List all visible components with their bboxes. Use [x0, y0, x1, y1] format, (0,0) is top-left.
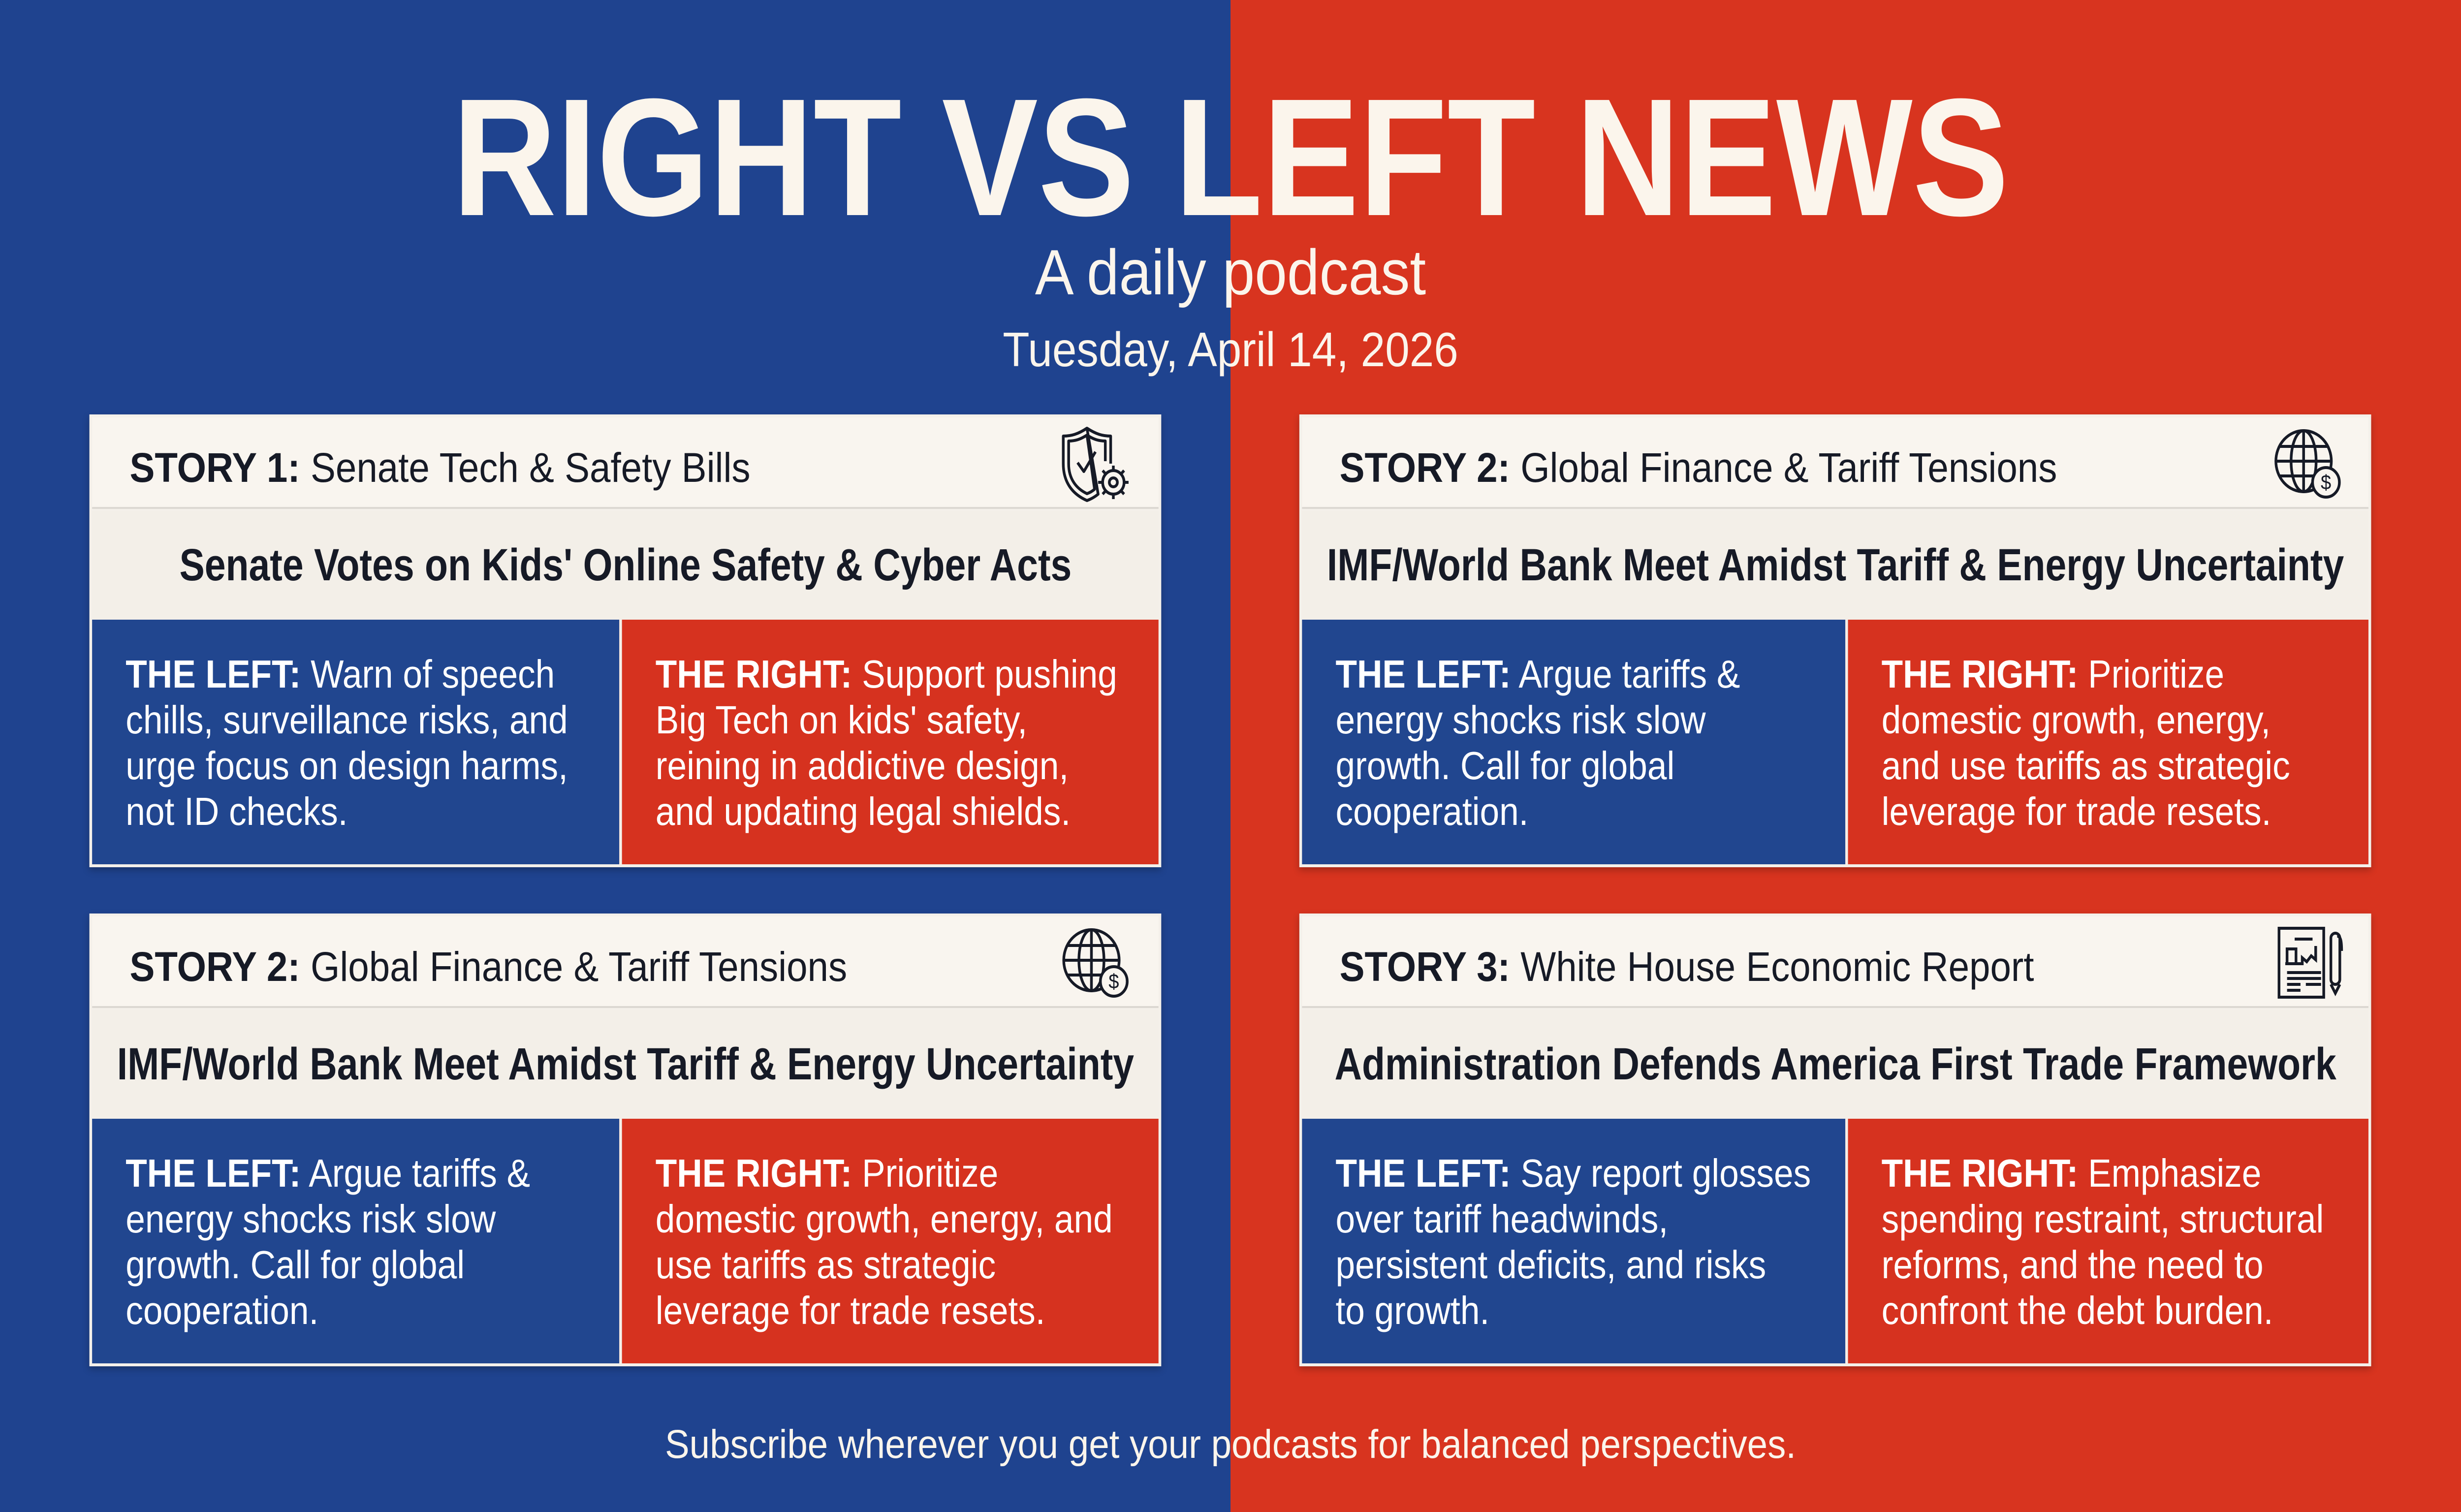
the right view: THE RIGHT: Support pushing	[656, 652, 1117, 696]
the right view	[1845, 1119, 2368, 1363]
the left view: chills, surveillance risks, and	[126, 698, 568, 742]
story headline	[1302, 1010, 2368, 1119]
the right view: and use tariffs as strategic	[1882, 744, 2290, 788]
story header: STORY 2: Global Finance & Tariff Tensions	[129, 944, 847, 990]
the left view: persistent deficits, and risks	[1335, 1243, 1766, 1287]
the right view	[619, 620, 1159, 864]
the left view: THE LEFT: Argue tariffs &	[1335, 652, 1740, 696]
panel: story 1	[90, 414, 1161, 867]
story headline: Senate Votes on Kids' Online Safety & Cyber Acts	[179, 540, 1072, 590]
the right view: reforms, and the need to	[1882, 1243, 2264, 1287]
story headline: IMF/World Bank Meet Amidst Tariff & Energy Uncertainty	[117, 1039, 1134, 1089]
the left view: energy shocks risk slow	[126, 1197, 496, 1241]
the right view: domestic growth, energy, and	[656, 1197, 1113, 1241]
the left view: cooperation.	[1335, 789, 1528, 833]
story header	[1302, 916, 2368, 1008]
icon: report with pen	[2278, 927, 2343, 999]
the left view: THE LEFT: Say report glosses	[1335, 1151, 1811, 1195]
story headline: IMF/World Bank Meet Amidst Tariff & Energy Uncertainty	[1326, 540, 2344, 590]
the left view	[92, 620, 619, 864]
icon: globe with dollar: $	[2321, 471, 2331, 494]
the right view: THE RIGHT: Prioritize	[1882, 652, 2224, 696]
the left view: energy shocks risk slow	[1335, 698, 1706, 742]
the right view: leverage for trade resets.	[656, 1289, 1045, 1332]
the right view: Big Tech on kids' safety,	[656, 698, 1027, 742]
title: RIGHT VS LEFT NEWS	[452, 64, 2009, 251]
story headline	[1302, 511, 2368, 620]
the right view: confront the debt burden.	[1882, 1289, 2273, 1332]
icon: globe with dollar	[2274, 429, 2341, 499]
icon: shield with gear	[1062, 427, 1129, 502]
icon: globe with dollar	[1062, 928, 1129, 998]
date: Tuesday, April 14, 2026	[1003, 322, 1458, 377]
story header: STORY 2: Global Finance & Tariff Tensions	[1340, 444, 2057, 491]
the right view: THE RIGHT: Emphasize	[1882, 1151, 2261, 1195]
story header	[1302, 417, 2368, 509]
icon: globe with dollar: $	[1108, 970, 1119, 993]
story headline: Administration Defends America First Trade Framework	[1334, 1039, 2336, 1089]
the left view: to growth.	[1335, 1289, 1489, 1332]
the left view: THE LEFT: Argue tariffs &	[126, 1151, 530, 1195]
story headline	[92, 1010, 1159, 1119]
story header	[92, 916, 1159, 1008]
the left view: THE LEFT: Warn of speech	[126, 652, 555, 696]
the right view: leverage for trade resets.	[1882, 789, 2271, 833]
the right view: THE RIGHT: Prioritize	[656, 1151, 998, 1195]
the left view	[1302, 620, 1845, 864]
the left view: urge focus on design harms,	[126, 744, 568, 788]
the right view: and updating legal shields.	[656, 789, 1071, 833]
footer text: Subscribe wherever you get your podcasts for balanced perspectives.	[665, 1422, 1796, 1467]
the left view	[92, 1119, 619, 1363]
the left view	[1302, 1119, 1845, 1363]
panel: story 2 (top right)	[1299, 414, 2371, 867]
story header	[92, 417, 1159, 509]
the right view: spending restraint, structural	[1882, 1197, 2324, 1241]
story header: STORY 3: White House Economic Report	[1340, 944, 2034, 990]
story headline	[92, 511, 1159, 620]
the left view: growth. Call for global	[1335, 744, 1674, 788]
the left view: over tariff headwinds,	[1335, 1197, 1668, 1241]
story header: STORY 1: Senate Tech & Safety Bills	[129, 444, 751, 491]
panel: story 3	[1299, 914, 2371, 1366]
the right view: use tariffs as strategic	[656, 1243, 996, 1287]
the right view: reining in addictive design,	[656, 744, 1069, 788]
the left view: cooperation.	[126, 1289, 318, 1332]
the right view	[1845, 620, 2368, 864]
subtitle: A daily podcast	[1035, 236, 1426, 308]
the right view: domestic growth, energy,	[1882, 698, 2271, 742]
the right view	[619, 1119, 1159, 1363]
the left view: not ID checks.	[126, 789, 348, 833]
the left view: growth. Call for global	[126, 1243, 465, 1287]
panel: story 2 (bottom left)	[90, 914, 1161, 1366]
